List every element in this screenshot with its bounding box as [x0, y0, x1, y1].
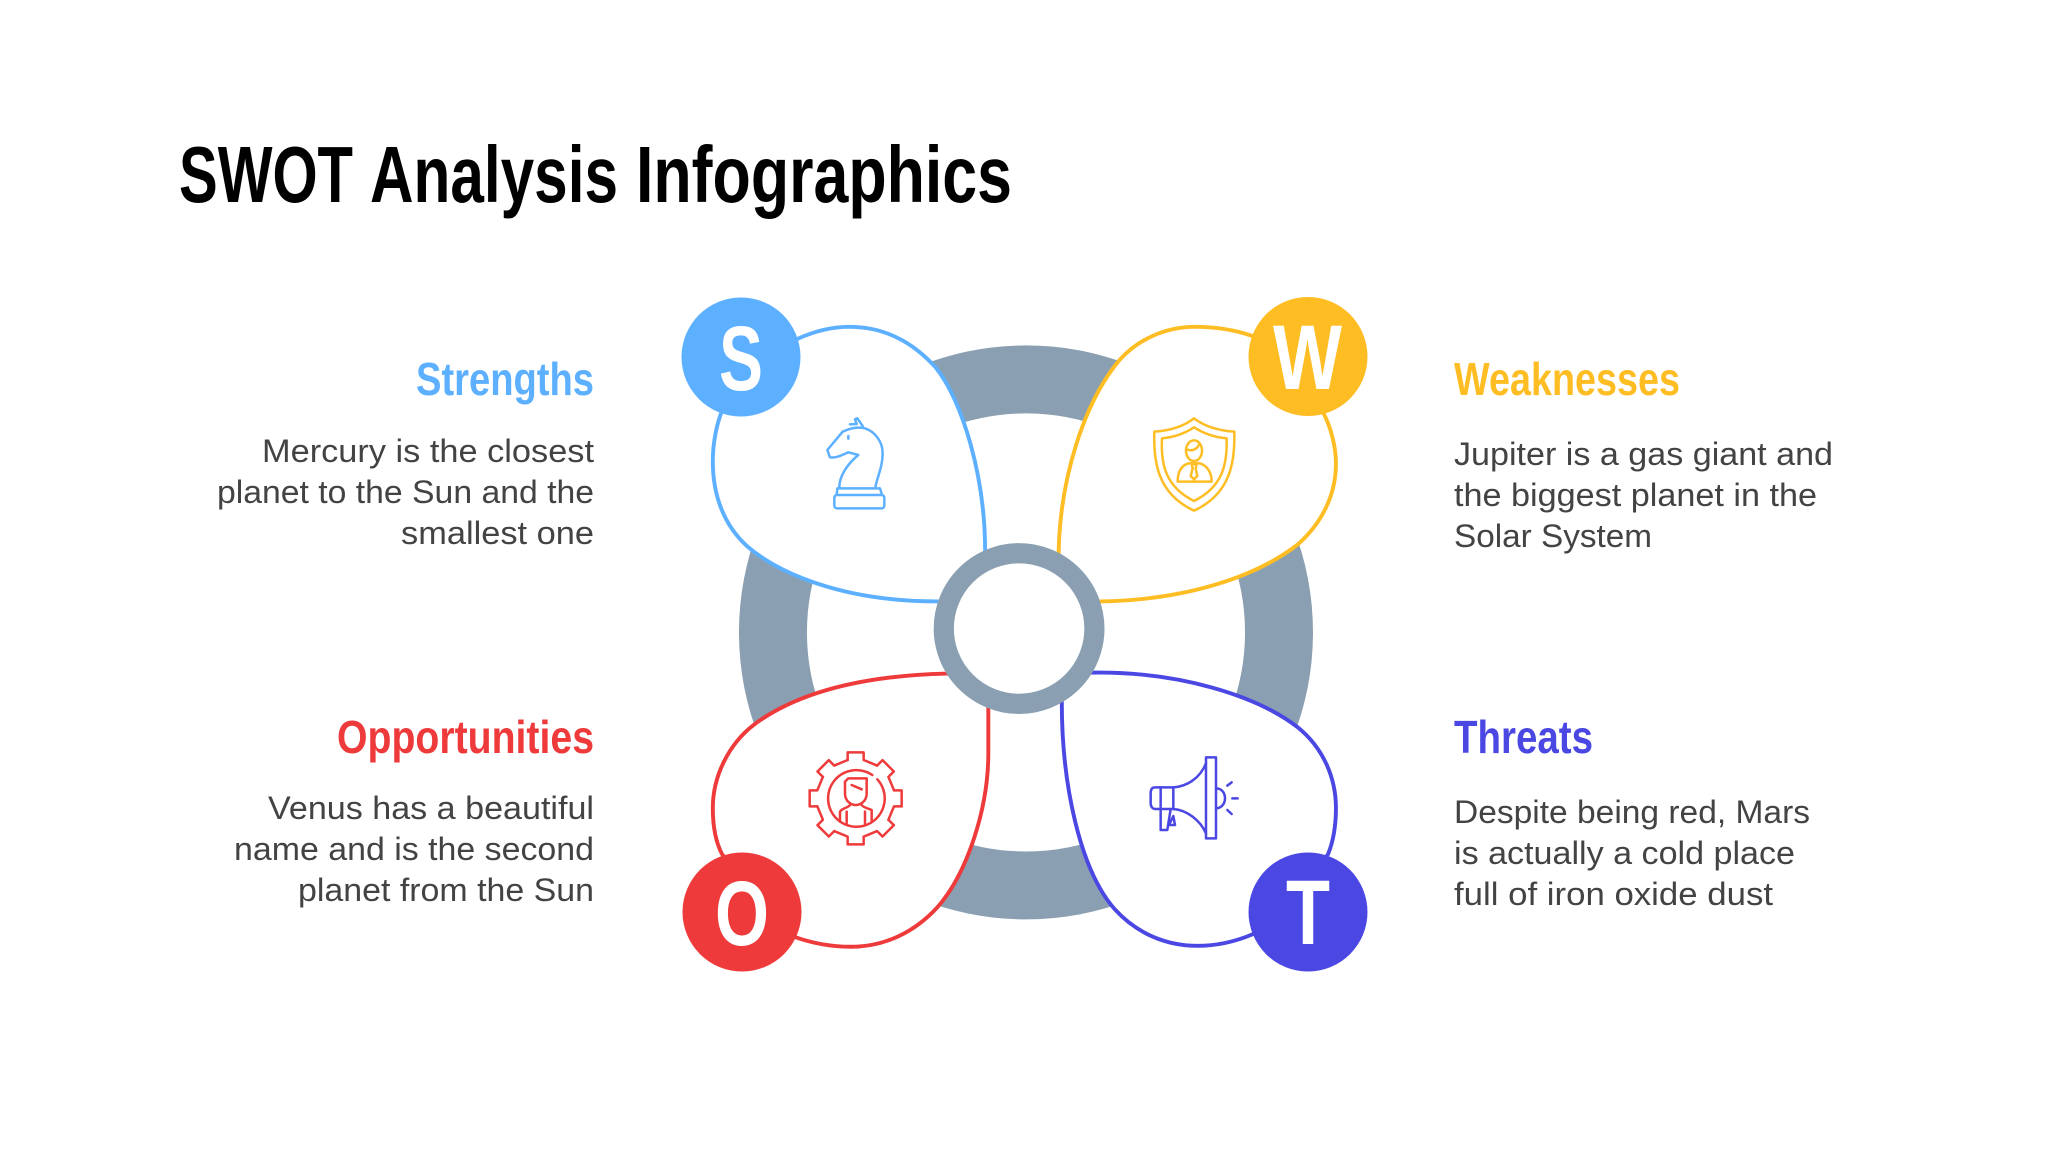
text block: weaknesses: Jupiter is a gas giant and: [1454, 436, 1833, 472]
badge: O: [682, 852, 802, 972]
badge: W: W: [1273, 307, 1342, 409]
badge: W: [1248, 297, 1368, 416]
icon: megaphone: [1151, 757, 1238, 838]
badge: S: S: [719, 308, 763, 410]
text block: opportunities: name and is the second: [234, 831, 594, 867]
heading: threats: Threats: [1454, 711, 1593, 763]
panel: opportunities text: [234, 711, 594, 908]
text block: opportunities: Venus has a beautiful: [268, 790, 594, 826]
text block: opportunities: planet from the Sun: [298, 872, 594, 908]
petal: strengths: [713, 327, 985, 601]
heading: weaknesses: Weaknesses: [1454, 353, 1680, 405]
badge: T: [1248, 852, 1368, 972]
title: Infographics: [636, 130, 1012, 219]
title: [179, 130, 1012, 219]
icon: chess knight: [827, 418, 884, 508]
panel: weaknesses text: [1454, 353, 1833, 554]
text block: threats: is actually a cold place: [1454, 835, 1795, 871]
icon: gear with person: [808, 751, 903, 846]
text block: weaknesses: [1454, 436, 1833, 554]
heading: strengths: Strengths: [416, 353, 594, 405]
diagram: SWOT petals and ring: [682, 297, 1368, 972]
title: Analysis: [370, 130, 618, 219]
badge: O: O: [715, 863, 769, 965]
text block: weaknesses: the biggest planet in the: [1454, 477, 1817, 513]
badge: S: [682, 298, 800, 416]
text block: strengths: planet to the Sun and the: [217, 474, 594, 510]
text block: opportunities: [234, 790, 594, 908]
text block: weaknesses: Solar System: [1454, 518, 1652, 554]
heading: opportunities: Opportunities: [337, 711, 594, 763]
center ring: [944, 553, 1094, 704]
title: SWOT: [179, 130, 353, 219]
panel: strengths text: [217, 353, 594, 551]
text block: threats: [1454, 794, 1810, 912]
grey outer ring: [773, 379, 1279, 885]
text block: threats: Despite being red, Mars: [1454, 794, 1810, 830]
badge: T: T: [1286, 862, 1330, 964]
petal: threats: [1062, 673, 1336, 946]
panel: threats text: [1454, 711, 1810, 912]
icon: shield with person: [1154, 418, 1234, 511]
text block: strengths: smallest one: [401, 515, 594, 551]
text block: threats: full of iron oxide dust: [1454, 876, 1773, 912]
text block: strengths: [217, 433, 594, 551]
text block: strengths: Mercury is the closest: [262, 433, 594, 469]
petal: weaknesses: [1059, 327, 1336, 601]
petal: opportunities: [713, 674, 988, 947]
